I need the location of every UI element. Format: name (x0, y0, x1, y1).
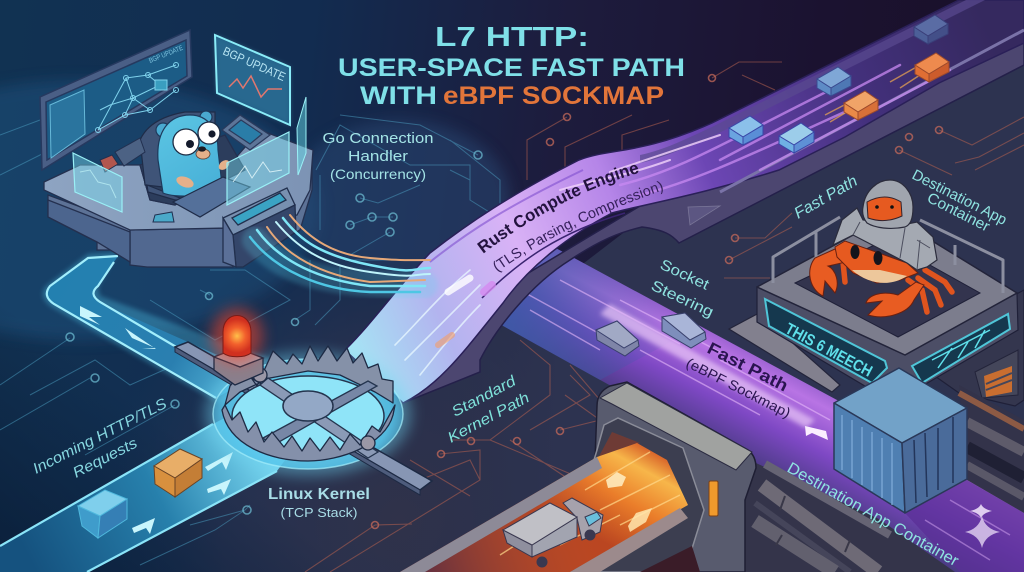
right claw (866, 282, 924, 317)
pipe bay (745, 458, 955, 572)
orange road (400, 443, 688, 572)
monitor small label: BGP UPDATE (148, 45, 184, 65)
crab mascot (810, 180, 952, 317)
trap centre plate (283, 391, 333, 421)
label: incoming requests: Incoming HTTP/TLS (30, 395, 170, 478)
right service block (905, 290, 1024, 406)
circuit traces: red (305, 62, 1024, 572)
cables from Go desk to bridge (250, 215, 430, 292)
bridge side and arch (403, 30, 1024, 403)
railings (773, 217, 1003, 293)
helmet (863, 180, 913, 228)
crab platform (729, 180, 1024, 406)
destination container (834, 368, 967, 513)
hinges (253, 368, 267, 382)
orange streaks behind packets (825, 65, 920, 122)
small rear console (222, 115, 270, 150)
sparkle mark (965, 504, 1000, 548)
trap cross bars (260, 378, 378, 458)
amber tunnel lights (709, 481, 718, 516)
large monitor (40, 30, 192, 170)
data packets on the bridge (729, 15, 949, 153)
gopher mascot (156, 111, 231, 196)
label: fast path eBPF sockmap: (eBPF Sockmap) (684, 354, 793, 421)
left panel display text: THIS 6 MEECH (782, 321, 875, 381)
cable connector block (223, 188, 296, 267)
title: USER-SPACE FAST PATH (338, 54, 685, 82)
label: fast path on crab side: Fast Path (792, 173, 861, 222)
label: Linux kernel: Linux Kernel (268, 486, 370, 503)
mesh floor (795, 240, 980, 337)
crab legs (843, 262, 952, 312)
label: Go connection handler: Go Connection (322, 130, 434, 147)
title: eBPF SOCKMAP (443, 82, 664, 110)
label: Go connection handler: (Concurrency) (330, 166, 426, 182)
long arm of trap (175, 342, 432, 490)
platform faces (757, 287, 1018, 392)
keyboard (173, 177, 250, 217)
side keypad and buttons (100, 138, 145, 172)
arrow head on fast path (805, 426, 828, 440)
back jaw teeth (225, 346, 393, 405)
label: destination app container upper: Destination App (909, 166, 1010, 229)
label: socket steering: Socket (657, 256, 712, 294)
arrows on the blue path (80, 306, 233, 534)
platform top (757, 215, 1017, 355)
armour (833, 208, 937, 270)
right panel display glyphs (932, 330, 990, 368)
bridge deck (345, 0, 1024, 403)
front jaw teeth (222, 405, 395, 461)
label: fast path eBPF sockmap: Fast Path (704, 339, 791, 396)
label: Go connection handler (322, 130, 434, 182)
network graph on monitor (50, 62, 178, 158)
crab shell (835, 241, 918, 283)
circuit nodes: red (372, 74, 942, 528)
tunnel: standard kernel path (400, 382, 756, 572)
title: L7 HTTP: (435, 21, 589, 52)
label: socket steering (648, 256, 716, 321)
circuit traces: blue (0, 115, 510, 565)
translucent right panel (227, 132, 289, 205)
label: socket steering: Steering (648, 277, 716, 321)
conduits right of container (959, 385, 1024, 513)
label: Rust compute engine: Rust Compute Engine (477, 164, 638, 254)
Linux kernel bear trap (175, 308, 432, 495)
label: standard kernel path (445, 372, 532, 447)
crab face in helmet (867, 197, 902, 221)
alarm base (214, 348, 263, 385)
platform base plate (729, 313, 840, 392)
tunnel frame (595, 382, 756, 572)
label: Linux kernel (268, 486, 370, 520)
request packets on blue path (78, 449, 202, 538)
left display panel (765, 299, 887, 383)
fast path purple beam (480, 218, 1024, 572)
left claw (810, 249, 846, 296)
rust compute bridge (345, 0, 1024, 403)
chair (140, 112, 215, 200)
bridge streaks (395, 65, 950, 375)
vertical slim panel (297, 97, 306, 175)
BGP update floating panel (215, 35, 290, 125)
packets on the fast path (596, 313, 706, 356)
circuit nodes: blue (66, 151, 482, 514)
badge on desk (153, 212, 174, 222)
vent on platform (975, 350, 1018, 398)
incoming blue request path (0, 252, 300, 572)
trap floor (232, 376, 384, 456)
label: incoming requests: Requests (70, 434, 141, 482)
label: Linux kernel: (TCP Stack) (280, 505, 358, 520)
label: standard kernel path: Standard (449, 372, 519, 421)
label: destination app container upper: Container (924, 189, 992, 235)
label: Go connection handler: Handler (348, 148, 408, 165)
translucent left panel (73, 153, 122, 212)
BGP update floating panel: BGP UPDATE (221, 44, 288, 84)
title: WITH (360, 82, 437, 110)
red alarm light (211, 308, 263, 364)
delivery truck (503, 498, 603, 567)
label: Rust compute engine: (TLS, Parsing, Compression) (494, 181, 663, 272)
Go connection handler desk (40, 30, 313, 267)
desk body (44, 130, 313, 267)
label: destination app container lower: Destination App Container (784, 460, 962, 570)
title (338, 21, 685, 110)
right display panel (912, 314, 1010, 383)
label: standard kernel path: Kernel Path (445, 389, 532, 447)
